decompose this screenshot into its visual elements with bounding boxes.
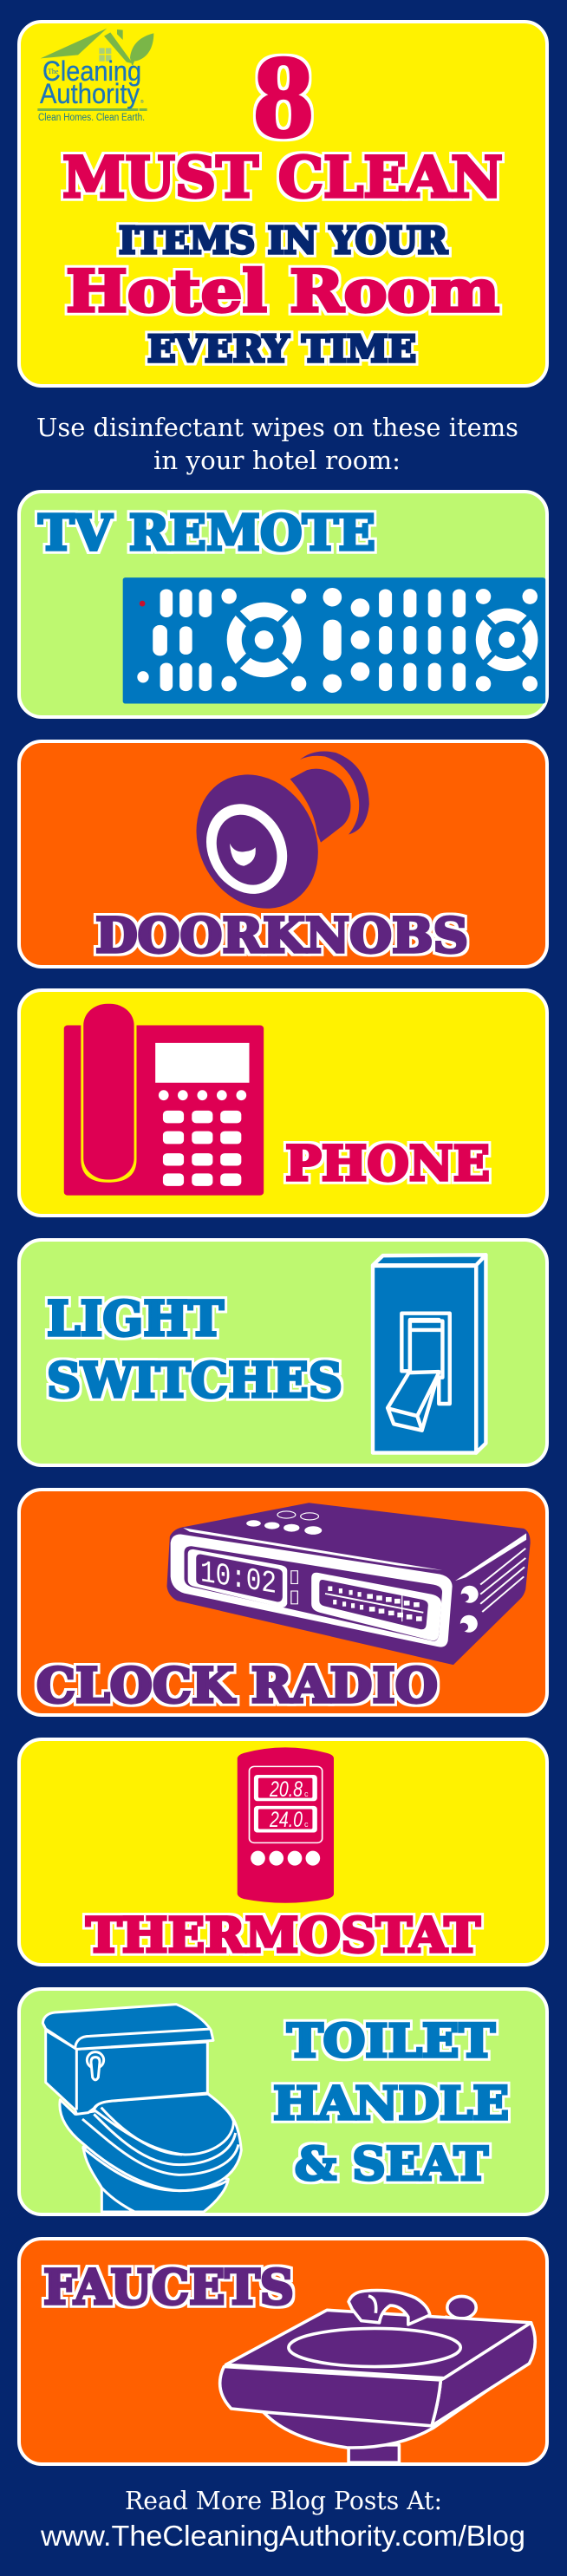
panel: thermostat xyxy=(19,1739,547,1965)
heading: 8: 8 xyxy=(252,36,315,161)
heading: clock radio: CLOCK RADIO xyxy=(36,1657,438,1713)
heading: handle: HANDLE xyxy=(273,2077,509,2130)
heading: must clean: MUST CLEAN xyxy=(62,145,503,211)
logo: The Cleaning Authority: Cleaning xyxy=(42,55,141,87)
icon: light switch xyxy=(373,1255,486,1453)
heading: light: LIGHT xyxy=(47,1290,224,1347)
panel: clock radio xyxy=(19,1490,547,1715)
panel: light switches xyxy=(19,1240,547,1465)
heading: doorknobs: DOORKNOBS xyxy=(95,907,468,963)
footer: blog url: www.TheCleaningAuthority.com/Blog xyxy=(40,2520,525,2552)
icon: toilet xyxy=(42,2005,241,2213)
logo: The Cleaning Authority: ® xyxy=(140,99,144,105)
heading: faucets: FAUCETS xyxy=(43,2259,294,2315)
heading: hotel room: Hotel Room xyxy=(66,258,499,325)
heading: items in your: ITEMS IN YOUR xyxy=(119,219,448,262)
heading: switches: SWITCHES xyxy=(47,1352,342,1408)
panel: TV remote xyxy=(19,492,547,717)
intro text: Use disinfectant wipes on these items xyxy=(36,413,518,442)
heading: and seat: & SEAT xyxy=(295,2138,488,2191)
icon: phone xyxy=(64,1004,264,1196)
logo: The Cleaning Authority xyxy=(37,29,153,123)
heading: every time: EVERY TIME xyxy=(147,328,416,370)
footer: read more: Read More Blog Posts At: xyxy=(125,2486,442,2515)
panel: phone xyxy=(19,990,547,1216)
panel: header xyxy=(19,22,547,386)
icon: remote control xyxy=(123,577,545,704)
heading: TV remote: TV REMOTE xyxy=(38,505,375,562)
logo: The Cleaning Authority: The xyxy=(48,68,59,75)
clock display digits: 10:02 xyxy=(200,1555,277,1602)
icon: sink and faucet xyxy=(220,2291,535,2462)
icon: clock radio xyxy=(167,1503,531,1665)
panel: faucets xyxy=(19,2239,547,2464)
intro text xyxy=(36,413,518,475)
logo: The Cleaning Authority: Clean Homes. Clean Earth. xyxy=(38,113,145,123)
panel: toilet handle and seat xyxy=(19,1989,547,2214)
thermostat unit labels: c xyxy=(304,1790,309,1798)
icon: thermostat xyxy=(238,1747,334,1903)
thermostat readout outdoor: 20.8 xyxy=(269,1777,303,1802)
thermostat readout indoor: 24.0 xyxy=(269,1808,303,1832)
panel: doorknobs xyxy=(19,741,547,967)
heading: thermostat: THERMOSTAT xyxy=(86,1907,480,1963)
intro text: in your hotel room: xyxy=(153,446,401,475)
thermostat unit labels xyxy=(304,1790,309,1829)
heading: toilet: TOILET xyxy=(287,2015,495,2068)
thermostat unit labels: c xyxy=(304,1820,309,1829)
logo: The Cleaning Authority: Authority xyxy=(40,78,140,109)
heading: phone: PHONE xyxy=(285,1135,490,1191)
icon: doorknob xyxy=(178,752,369,923)
